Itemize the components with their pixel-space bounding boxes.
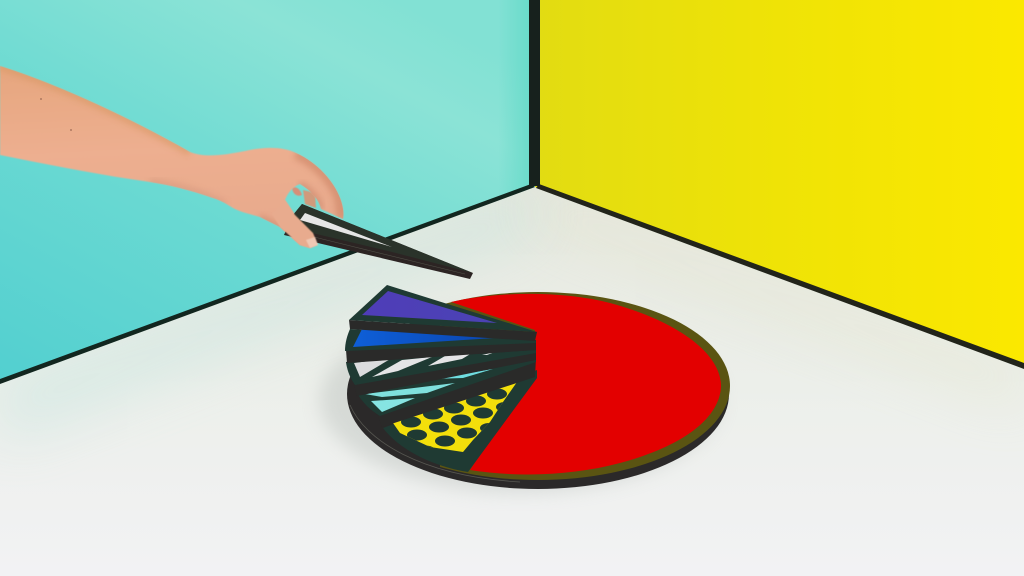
- arm and palm: [0, 66, 343, 248]
- thumb over slice: [272, 200, 318, 248]
- yellow dotted slice: [383, 370, 537, 472]
- skin shading: [0, 66, 343, 245]
- mole: [40, 98, 42, 100]
- lifted slice: [284, 204, 473, 279]
- wall edge trim: [0, 0, 1024, 384]
- pie shadow: [320, 308, 720, 492]
- floor: [0, 187, 1024, 436]
- purple slice: [349, 285, 537, 341]
- left wall: teal: [0, 0, 535, 383]
- pie base top rim: [440, 292, 730, 480]
- blue slice: [345, 329, 536, 363]
- pie base side: [347, 299, 729, 489]
- little and middle fingers behind slice: [292, 187, 316, 208]
- right wall: yellow: [535, 0, 1024, 368]
- red slice: [451, 294, 721, 474]
- arm and hand: [0, 66, 343, 248]
- thumbnail: [306, 237, 318, 248]
- white striped slice: [346, 342, 536, 396]
- polka dots: [401, 388, 507, 448]
- mole: [70, 129, 72, 131]
- teal striped slice: [357, 358, 536, 427]
- pie chart: [345, 285, 730, 489]
